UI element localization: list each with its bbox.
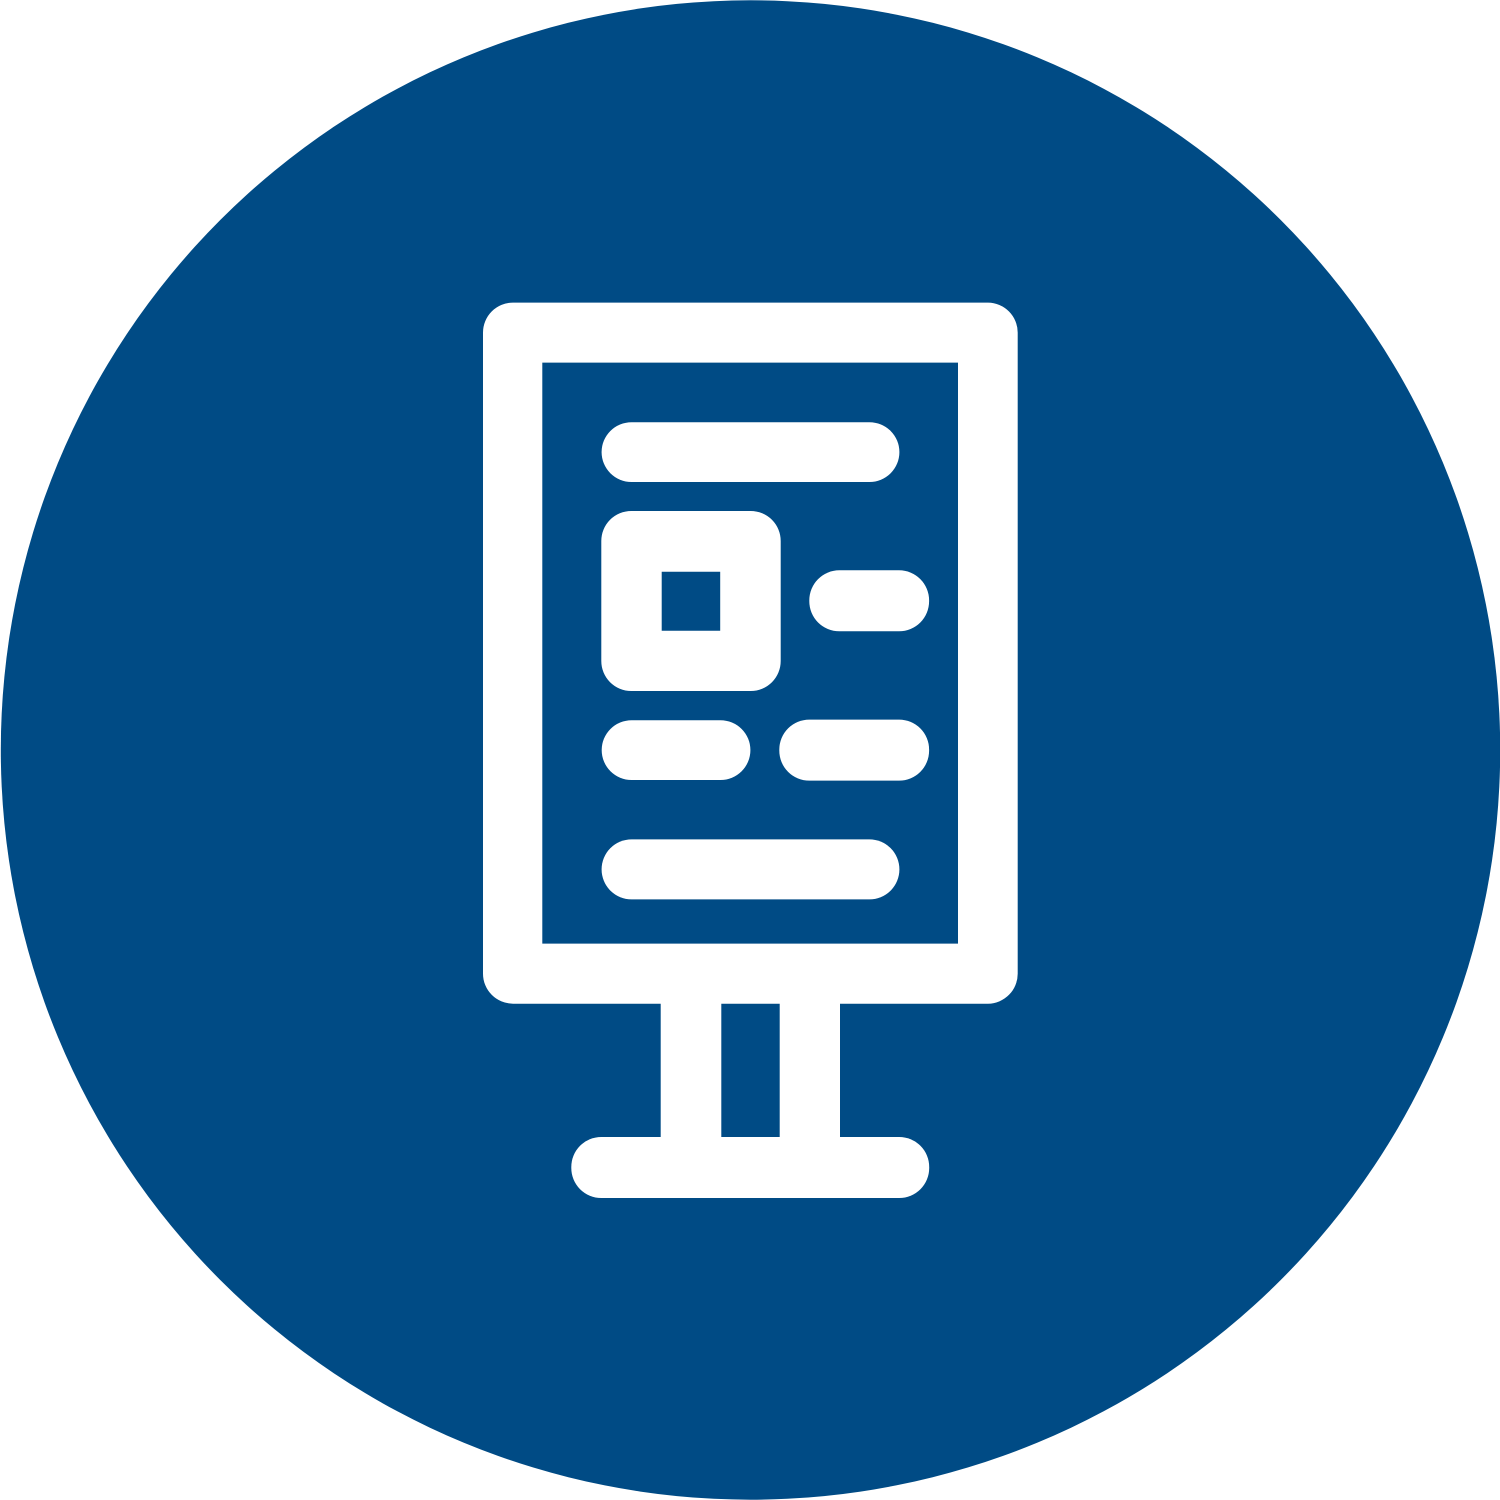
kiosk frame xyxy=(483,303,1018,1004)
bottom text bar xyxy=(602,839,899,899)
top text bar xyxy=(602,422,899,482)
lower right text bar xyxy=(779,720,929,781)
kiosk right post xyxy=(780,990,840,1150)
icon: kiosk xyxy=(483,303,1018,1198)
kiosk base xyxy=(571,1137,929,1198)
side text bar xyxy=(809,570,929,631)
kiosk left post xyxy=(661,990,721,1150)
image placeholder xyxy=(601,511,781,691)
lower left text bar xyxy=(602,720,750,780)
